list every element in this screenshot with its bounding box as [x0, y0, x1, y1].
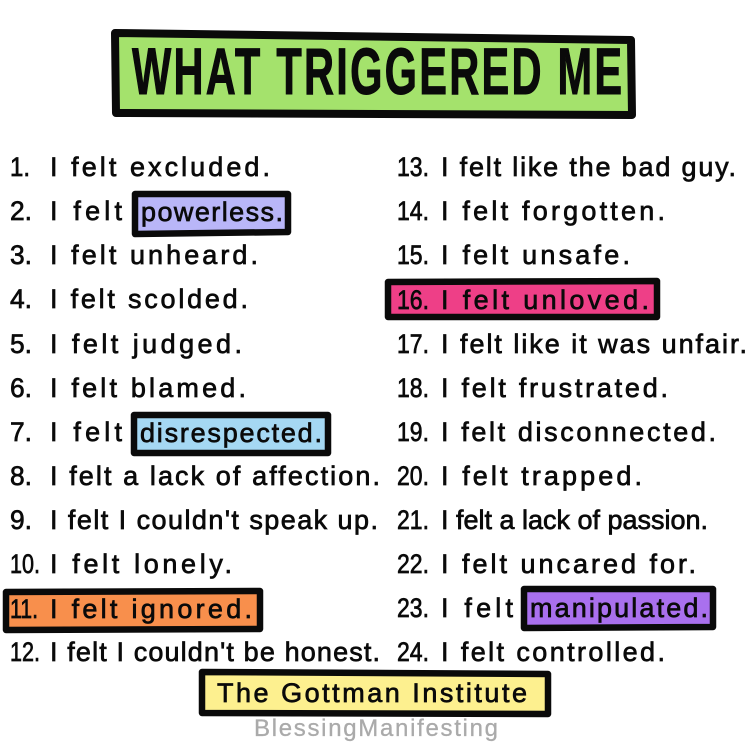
item 13: 13. [397, 152, 429, 182]
item 2 highlighted powerless: powerless. [141, 197, 283, 227]
item 23 highlighted manipulated: 23. [397, 593, 429, 623]
item 24: 24. [397, 637, 429, 667]
item 8: I felt a lack of affection. [50, 461, 380, 491]
item 19: 19. [397, 417, 429, 447]
item 2 highlighted powerless: I felt [50, 196, 122, 226]
item 7 highlighted disrespected: I felt [50, 417, 122, 447]
item 7 highlighted disrespected: disrespected. [140, 418, 322, 448]
item 11 highlighted orange: I felt ignored. [50, 594, 252, 624]
item 4: I felt scolded. [50, 284, 248, 314]
item 12: 12. [10, 637, 40, 667]
item 20: I felt trapped. [441, 461, 642, 491]
item 7 highlighted disrespected: 7. [10, 417, 32, 447]
item 14: 14. [397, 196, 429, 226]
item 22: I felt uncared for. [441, 549, 696, 579]
item 22: 22. [397, 549, 429, 579]
title banner: WHAT TRIGGERED ME [132, 34, 622, 108]
item 9: 9. [10, 505, 32, 535]
item 11 highlighted orange [6, 591, 260, 630]
item 2 highlighted powerless: 2. [10, 196, 32, 226]
item 6: 6. [10, 373, 32, 403]
item 18: 18. [397, 373, 429, 403]
item 23 highlighted manipulated: I felt [441, 593, 513, 623]
item 3: I felt unheard. [50, 240, 258, 270]
item 15: I felt unsafe. [441, 240, 630, 270]
item 20: 20. [397, 461, 429, 491]
source label: The Gottman Institute [202, 672, 548, 714]
item 21: 21. [397, 505, 429, 535]
item 13: I felt like the bad guy. [441, 152, 736, 182]
item 15: 15. [397, 240, 429, 270]
item 23 highlighted manipulated: manipulated. [530, 593, 708, 623]
item 14: I felt forgotten. [441, 196, 665, 226]
item 12: I felt I couldn't be honest. [50, 637, 380, 667]
item 3: 3. [10, 240, 32, 270]
item 21: I felt a lack of passion. [441, 505, 708, 535]
item 16 highlighted pink [388, 281, 657, 317]
item 9: I felt I couldn't speak up. [50, 505, 378, 535]
item 19: I felt disconnected. [441, 417, 716, 447]
item 24: I felt controlled. [441, 637, 665, 667]
item 5: I felt judged. [50, 329, 242, 359]
item 16 highlighted pink: 16. [397, 285, 429, 315]
right column list [388, 152, 747, 667]
source label: The Gottman Institute: The Gottman Institute [217, 678, 527, 708]
item 2 highlighted powerless [10, 194, 288, 234]
left column list [6, 152, 380, 667]
item 7 highlighted disrespected [10, 415, 328, 453]
item 6: I felt blamed. [50, 373, 246, 403]
item 10: 10. [10, 549, 40, 579]
item 11 highlighted orange: 11. [10, 594, 38, 624]
item 8: 8. [10, 461, 32, 491]
item 4: 4. [10, 284, 32, 314]
watermark: BlessingManifesting [254, 715, 498, 742]
item 1: 1. [10, 152, 30, 182]
item 5: 5. [10, 329, 32, 359]
item 23 highlighted manipulated [397, 589, 713, 628]
item 18: I felt frustrated. [441, 373, 668, 403]
item 16 highlighted pink: I felt unloved. [441, 285, 649, 315]
item 17: 17. [397, 329, 429, 359]
item 17: I felt like it was unfair. [441, 329, 747, 359]
item 10: I felt lonely. [50, 549, 232, 579]
item 1: I felt excluded. [50, 152, 270, 182]
